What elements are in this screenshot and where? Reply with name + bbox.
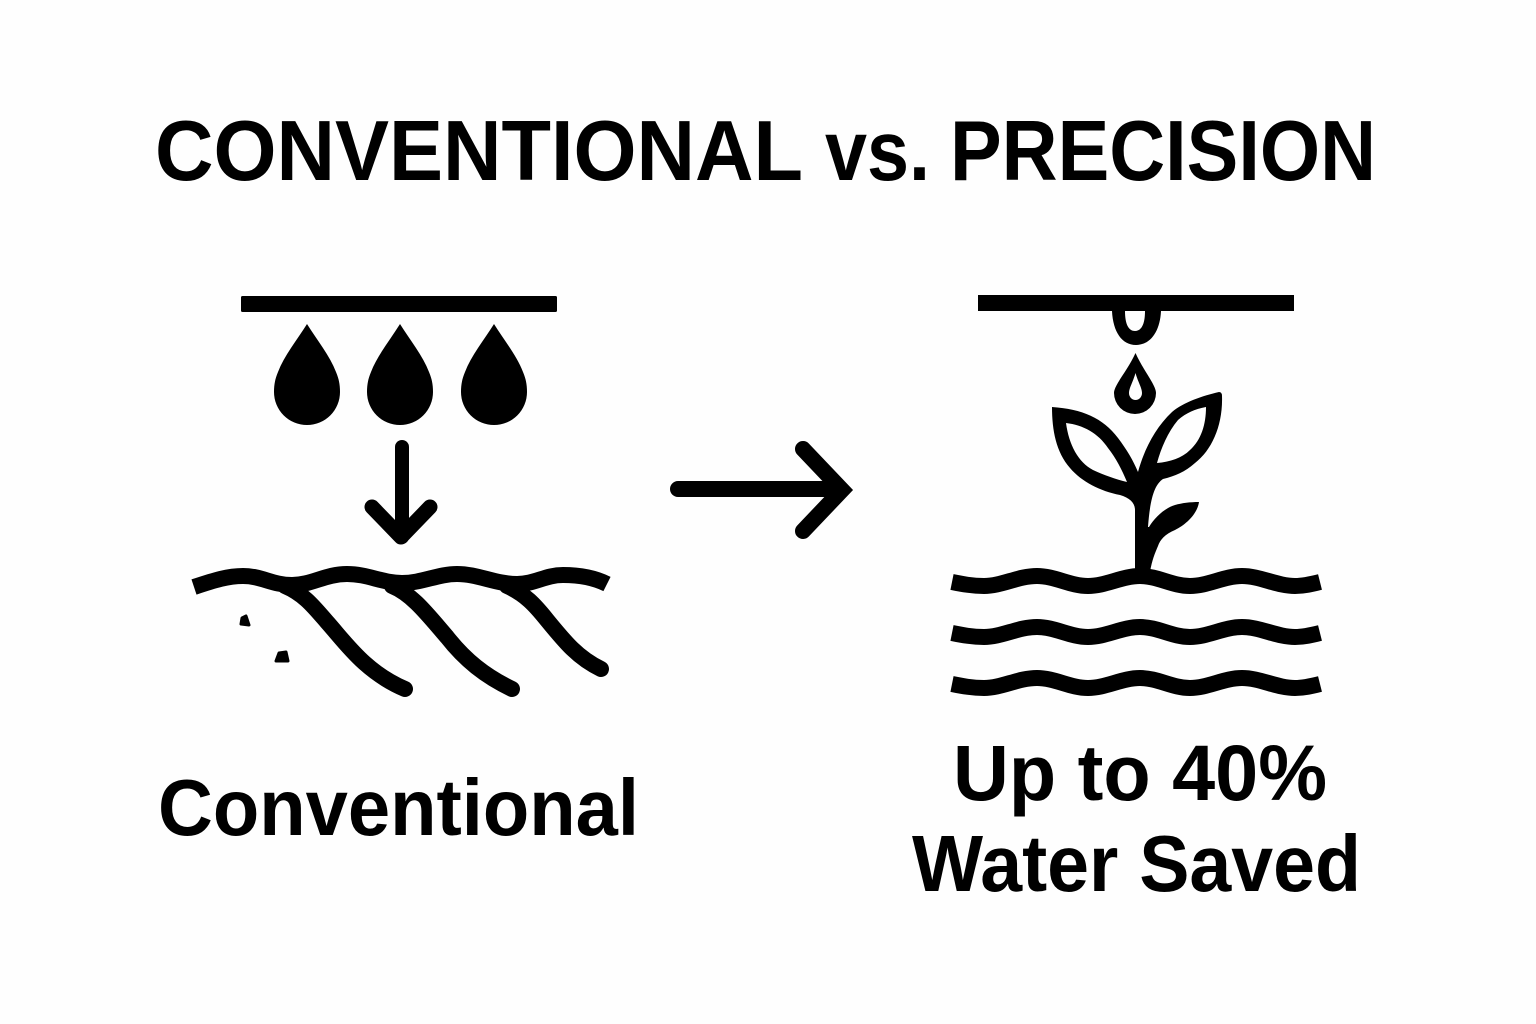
label: water saved: Up to 40% [953, 728, 1327, 817]
arrow: down to soil [372, 447, 430, 537]
icon: drip line [978, 295, 1294, 345]
icon: soil furrows [194, 574, 607, 689]
title: PRECISION [950, 104, 1376, 199]
icon: water waves [952, 576, 1320, 688]
icon: three water drops [274, 324, 527, 425]
icon: small water drop [1114, 353, 1156, 414]
panel: conventional irrigation [158, 296, 639, 852]
icon: plant [1052, 392, 1222, 572]
arrow: conventional to precision [678, 449, 842, 531]
label: water saved: Water Saved [912, 819, 1361, 908]
title: vs. [825, 104, 930, 199]
panel: precision irrigation [912, 295, 1361, 908]
title: CONVENTIONAL [155, 104, 803, 199]
icon: sprinkler bar [241, 296, 557, 312]
label: conventional: Conventional [158, 763, 639, 852]
title [155, 104, 1376, 199]
label: water saved [912, 728, 1361, 908]
